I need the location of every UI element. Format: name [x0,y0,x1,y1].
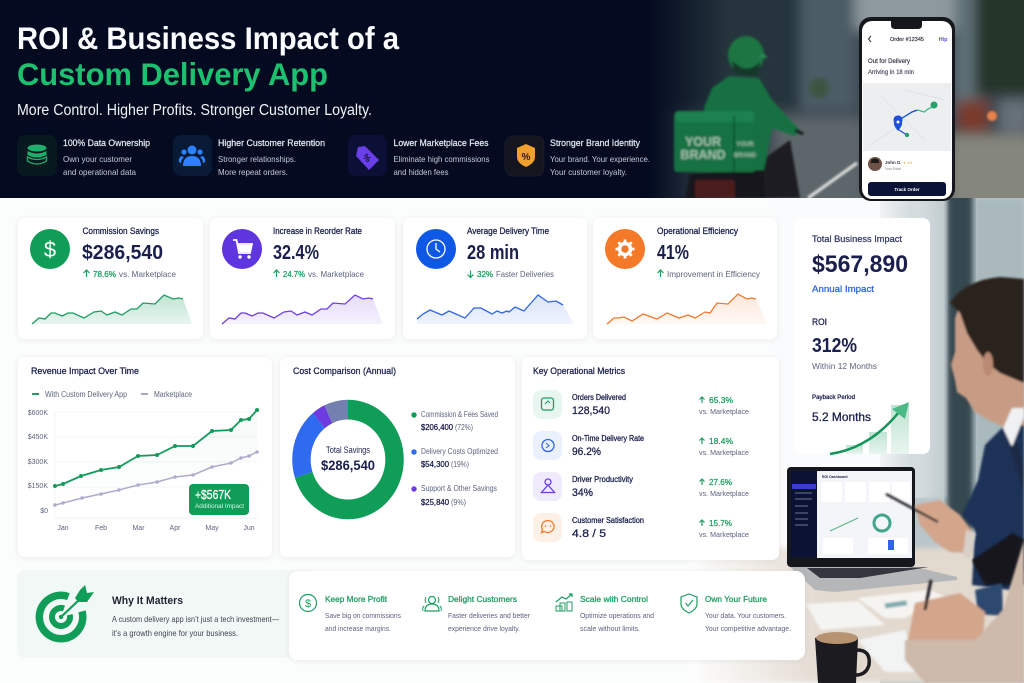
KPI card: commission savings: vs. Marketplace [119,269,176,279]
panel: revenue impact chart [18,357,272,557]
KPI card: delivery time: 32% [477,269,493,279]
KPI card: commission savings [18,218,203,339]
benefit: own your future [681,594,791,633]
phone mockup: ★ 4.8 [903,161,912,165]
feature: brand identity [505,136,650,177]
rider with delivery box: YOUR [736,142,754,148]
feature: fees: Eliminate high commissions [394,154,490,164]
line chart: Jun [243,525,255,532]
phone mockup: Out for Delivery [868,59,910,65]
KPI card: commission savings: Commission Savings [82,226,159,236]
callout: additional impact [189,484,249,515]
feature: fees [348,135,490,177]
map with route [863,83,951,151]
metric: customer satisfaction: 15.7% [709,518,732,528]
panel: revenue impact chart: Revenue Impact Over Time [31,366,139,377]
panel: total business impact: Payback Period [812,394,855,401]
KPI card: reorder rate [210,218,395,339]
panel: benefit strip [289,571,805,660]
line chart: $600K [28,410,48,417]
man portrait [950,277,1024,590]
KPI card: reorder rate: 32.4% [273,241,319,264]
donut legend: (19%) [451,460,469,469]
legend [32,390,192,399]
line chart: Mar [132,525,145,532]
feature: brand identity: Stronger Brand Identity [550,138,640,148]
benefit: delight customers: experience drive loyalty. [448,624,520,633]
legend: With Custom Delivery App [45,390,127,399]
KPI card: commission savings: $286,540 [82,241,163,264]
sparkline [417,295,574,324]
benefit: keep more profit: Save big on commissions [325,611,401,620]
feature: retention [173,135,325,177]
KPI card: reorder rate: vs. Marketplace [308,269,364,279]
icon: target with arrow [39,585,94,639]
coffee mug [815,632,869,683]
metric: orders delivered: 128,540 [572,405,610,417]
benefit: own your future: Your data. Your customers. [705,611,786,620]
feature: brand identity: Your brand. Your experience. [550,154,650,164]
icon: shield: % [522,152,531,163]
KPI card: delivery time: Faster Deliveries [496,269,554,279]
feature: retention: Stronger relationships. [218,154,296,164]
benefit: own your future: Your competitive advantage. [705,624,791,633]
feature: brand identity: Your customer loyalty. [550,167,627,177]
benefit: delight customers: Faster deliveries and better [448,611,530,620]
benefit: scale with control: Optimize operations and [580,611,654,620]
phone mockup: Arriving in 18 min [868,70,914,76]
feature: data ownership: 100% Data Ownership [63,138,150,148]
metric: orders delivered [533,390,749,419]
line chart [28,408,259,532]
KPI card: delivery time: Average Delivery Time [467,226,549,236]
donut legend: $206,400 [421,423,454,432]
callout: additional impact: Additional Impact [195,503,244,510]
feature: data ownership: and operational data [63,167,136,177]
donut legend [411,410,498,507]
laptop: ROI Dashboard [822,475,847,479]
donut legend: Commission & Fees Saved [421,410,498,419]
line chart: $300K [28,459,48,466]
metric: customer satisfaction [533,513,749,542]
phone mockup: Order #12345 [890,37,924,43]
header photo: street scene [660,0,1024,198]
KPI card: reorder rate: Increase in Reorder Rate [273,226,362,236]
panel: total business impact: 5.2 Months [812,410,871,424]
benefit: scale with control: Scale with Control [580,594,648,604]
panel: total business impact: Annual Impact [812,284,874,295]
donut legend: (9%) [451,498,466,507]
donut centre label: $286,540 [321,458,375,473]
line chart: $0 [40,508,48,515]
icon: dollar [30,229,70,269]
panel: cost comparison [280,357,515,557]
feature: fees: and hidden fees [394,167,448,177]
KPI card: operational efficiency: Operational Efficiency [657,226,738,236]
KPI card: delivery time: 28 min [467,241,519,264]
metric: orders delivered: 65.3% [709,395,733,405]
line chart: $450K [28,434,48,441]
metric: customer satisfaction: Customer Satisfaction [572,516,644,525]
KPI card: delivery time [403,218,587,339]
metric: driver productivity [533,472,749,501]
panel: total business impact: ROI [812,317,827,328]
metric: orders delivered: vs. Marketplace [699,407,749,416]
benefit: delight customers [423,594,530,633]
donut legend: (72%) [455,423,473,432]
icon: shield [517,144,535,167]
metric: on-time delivery [533,431,749,460]
callout: additional impact: +$567K [195,488,232,502]
benefit: keep more profit: and increase margins. [325,624,391,633]
panel: key operational metrics: Key Operational Metrics [533,366,625,377]
feature: retention: Higher Customer Retention [218,138,325,148]
icon: database [28,144,46,164]
metric: on-time delivery: 96.2% [572,446,601,458]
hand with pen [886,494,1024,585]
phone mockup [859,17,955,201]
icon: price tag: % [361,152,373,164]
legend: Marketplace [154,390,192,399]
subtitle: More Control. Higher Profits. Stronger Customer Loyalty. [17,102,372,119]
metric: driver productivity: vs. Marketplace [699,489,749,498]
donut legend: $54,300 [421,460,450,469]
sparkline [32,295,192,324]
line chart: Jan [57,525,69,532]
paper sheets [806,590,948,672]
icon: people [179,146,205,166]
line chart: $150K [28,483,48,490]
line chart: May [205,525,219,532]
donut legend: Delivery Costs Optimized [421,447,498,456]
metric: driver productivity: 27.6% [709,477,732,487]
title: ROI & Business Impact of a [17,20,399,56]
rider with delivery box: BRAND [680,148,726,162]
laptop [787,467,957,592]
title: Custom Delivery App [17,56,328,92]
panel: why it matters: Why It Matters [112,595,183,607]
panel: why it matters [17,570,317,658]
line chart: Feb [95,525,107,532]
phone mockup: Track Order [894,187,920,192]
KPI card: operational efficiency [593,218,777,339]
metric: on-time delivery: On-Time Delivery Rate [572,434,644,443]
panel: key operational metrics [522,357,779,560]
panel: total business impact [794,218,930,454]
panel: total business impact: $567,890 [812,251,908,278]
second person's hand and sleeve [905,540,1024,683]
donut legend: $25,840 [421,498,450,507]
phone mockup: Your Rider [885,167,902,171]
panel: cost comparison: Cost Comparison (Annual) [293,366,396,377]
feature: data ownership: Own your customer [63,154,132,164]
donut centre label [321,445,375,473]
panel: why it matters: it’s a growth engine for your business. [112,628,238,638]
line chart: Apr [170,525,181,532]
icon: dollar: $ [44,237,56,262]
benefit: delight customers: Delight Customers [448,594,517,604]
panel: total business impact: Total Business Impact [812,234,902,245]
growth arrow [830,402,909,454]
metric: driver productivity: Driver Productivity [572,475,633,484]
benefit: scale with control [556,594,654,633]
title [17,20,399,92]
metric: on-time delivery: 18.4% [709,436,733,446]
icon: price tag [356,146,379,170]
KPI card: operational efficiency: 41% [657,241,689,264]
icon: clock [416,229,456,269]
KPI card: commission savings: 78.6% [93,269,116,279]
header band [0,0,1024,220]
panel: why it matters: A custom delivery app isn’t just a tech investment— [112,614,279,624]
metric: customer satisfaction: 4.8 / 5 [572,528,606,540]
KPI card: operational efficiency: Improvement in Efficiency [667,269,761,279]
KPI card: reorder rate: 24.7% [283,269,305,279]
metric: customer satisfaction: vs. Marketplace [699,530,749,539]
office scene: laptop, desk, people [787,277,1024,683]
metric: driver productivity: 34% [572,487,593,499]
feature: retention: More repeat orders. [218,167,288,177]
panel: total business impact: 312% [812,335,857,357]
metric: orders delivered: Orders Delivered [572,393,626,402]
benefit: own your future: Own Your Future [705,594,767,604]
icon: cart [222,229,262,269]
rider with delivery box: YOUR [685,135,721,149]
benefit: keep more profit [300,594,401,633]
sparkline [607,294,767,324]
donut centre label: Total Savings [326,445,370,455]
sparkline [222,295,383,324]
benefit: keep more profit: $ [305,598,311,610]
feature: fees: Lower Marketplace Fees [394,138,489,148]
benefit: scale with control: scale without limits. [580,624,640,633]
feature: data ownership [17,135,150,177]
donut chart [301,410,395,509]
phone mockup: John D. [885,160,902,165]
metric: on-time delivery: vs. Marketplace [699,448,749,457]
office photo background [690,190,1024,683]
benefit: keep more profit: Keep More Profit [325,594,388,604]
rider with delivery box [674,36,803,198]
rider with delivery box: BRAND [734,153,756,159]
phone mockup: Hlp [939,37,948,43]
icon: gear [605,229,645,269]
panel: total business impact: Within 12 Months [812,361,877,371]
donut legend: Support & Other Savings [421,484,497,493]
